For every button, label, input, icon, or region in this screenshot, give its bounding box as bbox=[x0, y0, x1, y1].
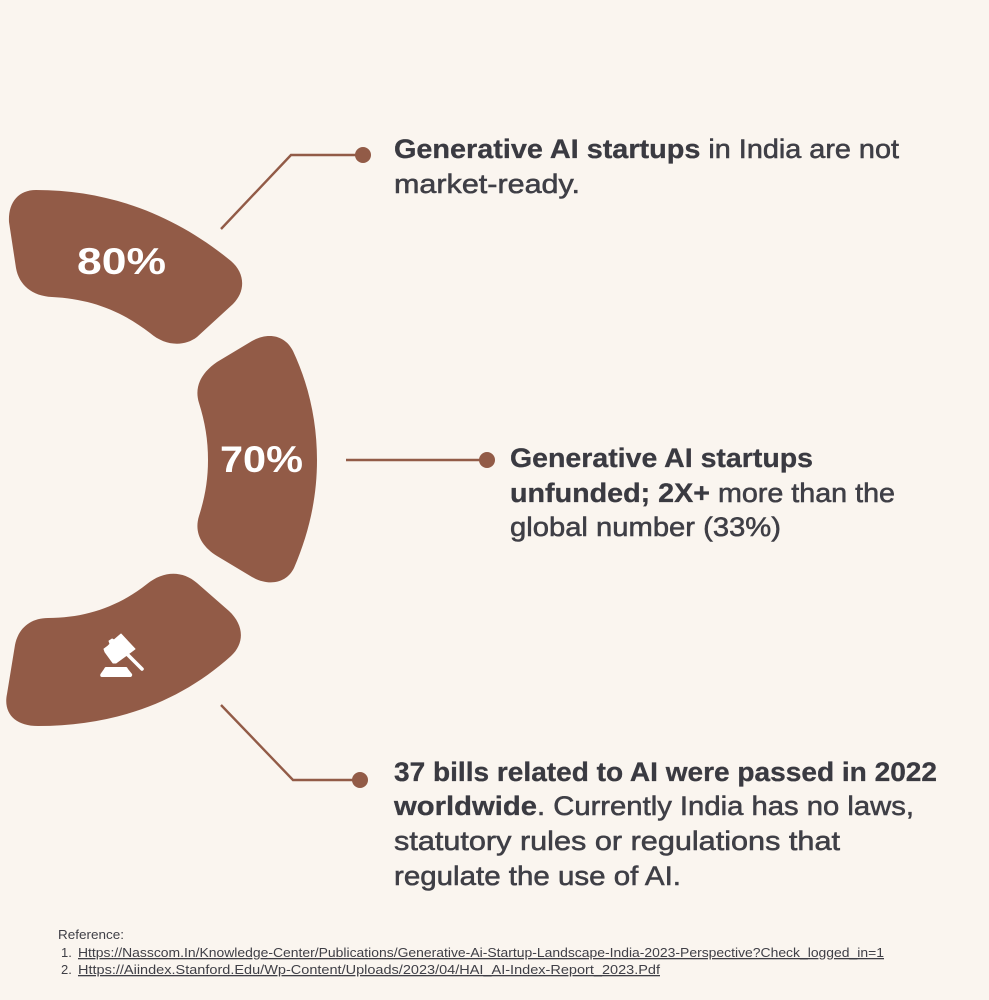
connector: 80% to first statement bbox=[221, 147, 371, 229]
text block: first statement bbox=[394, 134, 900, 199]
references bbox=[58, 927, 884, 977]
text block: second statement: unfunded; 2X+ more than the bbox=[510, 478, 895, 508]
references: Https://Nasscom.In/Knowledge-Center/Publications/Generative-Ai-Startup-Landscape-India-2023-Perspective?Check_logged_in=1 bbox=[78, 945, 884, 960]
stat: 70%: 70% bbox=[220, 439, 303, 480]
text block: third statement: 37 bills related to AI were passed in 2022 bbox=[394, 757, 937, 787]
stat: 80%: 80% bbox=[77, 241, 166, 282]
text block: second statement: Generative AI startups bbox=[510, 443, 813, 473]
panel: 70% arc segment bbox=[197, 336, 317, 582]
references: 2. bbox=[61, 962, 72, 977]
references: Https://Aiindex.Stanford.Edu/Wp-Content/Uploads/2023/04/HAI_AI-Index-Report_2023.Pdf bbox=[78, 962, 660, 977]
connector: 70% to second statement bbox=[346, 452, 495, 468]
text block: third statement: worldwide . Currently India has no laws, bbox=[393, 791, 914, 821]
references: 1. bbox=[61, 945, 72, 960]
text block: third statement: regulate the use of AI. bbox=[394, 861, 681, 891]
text block: first statement: Generative AI startups in India are not bbox=[394, 134, 900, 164]
text block: third statement: statutory rules or regulations that bbox=[394, 826, 841, 856]
text block: first statement: market-ready. bbox=[394, 169, 580, 199]
references: Reference: bbox=[58, 927, 124, 942]
text block: third statement bbox=[393, 757, 937, 891]
connector: gavel to third statement bbox=[221, 705, 368, 788]
panel: gavel arc segment bbox=[6, 574, 241, 726]
icon: gavel bbox=[100, 634, 142, 677]
text block: second statement bbox=[510, 443, 895, 542]
panel: 80% arc segment bbox=[9, 190, 242, 344]
text block: second statement: global number (33%) bbox=[510, 512, 781, 542]
